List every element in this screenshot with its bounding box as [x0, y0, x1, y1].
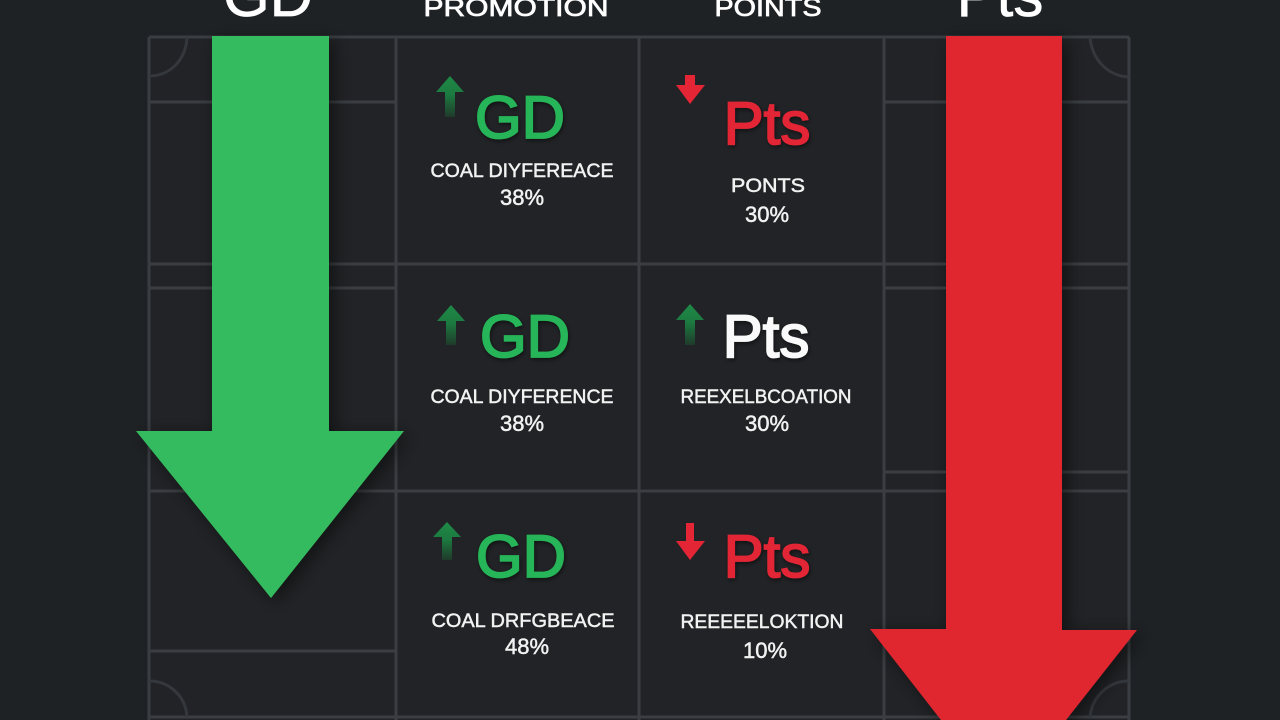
- value: GD: GD: [476, 523, 566, 590]
- label: COAL DRFGBEACE: [432, 610, 614, 632]
- label: REEEEELOKTION: [680, 611, 844, 633]
- cell: row 3 points: [676, 523, 844, 663]
- large green arrow: [136, 36, 404, 598]
- cell: row 1 goal difference: [430, 76, 614, 210]
- label: PONTS: [731, 175, 805, 197]
- percentage: 38%: [500, 185, 544, 210]
- label: REEXELBCOATION: [680, 386, 852, 408]
- percentage: 38%: [500, 411, 544, 436]
- cell: row 2 points: [676, 303, 852, 436]
- icon: red down arrow: [676, 523, 705, 560]
- icon: green up arrow: [676, 304, 704, 345]
- value: Pts: Pts: [724, 90, 810, 157]
- value: GD: GD: [475, 84, 565, 151]
- large red arrow: [870, 36, 1137, 720]
- value: Pts: Pts: [724, 523, 810, 590]
- icon: red down arrow: [676, 75, 705, 104]
- icon: green up arrow: [433, 522, 461, 560]
- value: GD: GD: [480, 303, 570, 370]
- label: COAL DIYFEREACE: [430, 160, 614, 182]
- cell: row 1 points: [676, 75, 810, 227]
- cell: row 2 goal difference: [430, 303, 614, 436]
- value: Pts: Pts: [723, 303, 809, 370]
- icon: green up arrow: [436, 76, 464, 117]
- percentage: 48%: [505, 634, 549, 659]
- label: COAL DIYFERENCE: [430, 386, 614, 408]
- cell: row 3 goal difference: [432, 522, 614, 659]
- percentage: 30%: [745, 202, 789, 227]
- percentage: 30%: [745, 411, 789, 436]
- icon: green up arrow: [437, 305, 465, 345]
- percentage: 10%: [743, 638, 787, 663]
